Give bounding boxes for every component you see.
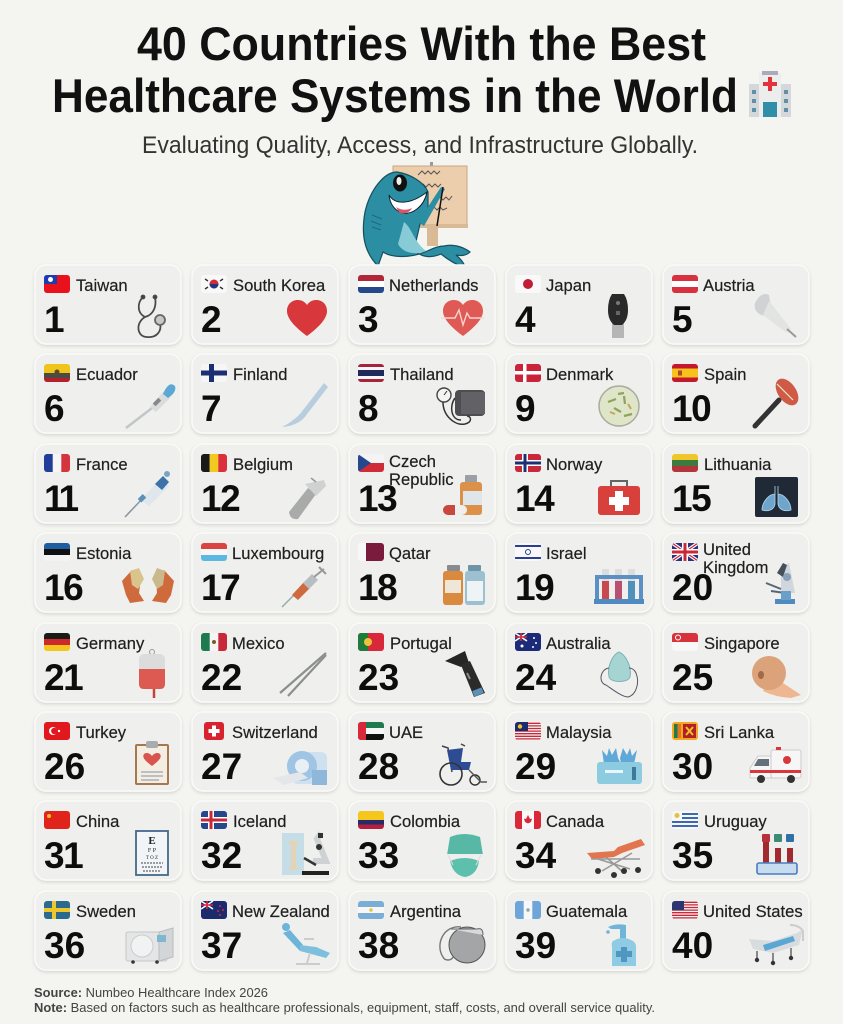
card: Finland [192,354,338,433]
name: Malaysia [546,723,612,742]
icon: ambulance [750,747,801,783]
card: Portugal [349,623,495,702]
flag: Singapore [672,633,698,651]
name: Portugal [390,634,452,653]
flag: Canada [515,811,541,829]
flag: Uruguay [672,811,698,829]
card: Denmark [506,354,652,433]
icon: bandage roll [752,656,801,698]
rank: 15 [672,478,711,519]
name: Sweden [76,902,136,921]
rank: 1 [44,299,65,340]
rank: 9 [515,388,536,429]
card: Czech Republic [349,444,495,523]
icon: blood sample tubes [757,834,797,874]
name: Luxembourg [232,544,324,563]
icon: stretcher [587,839,645,878]
icon: thermometer [126,384,175,428]
flag: Japan [515,275,541,293]
icon: test tube rack [594,569,644,604]
name: Netherlands [389,276,478,295]
name: Switzerland [232,723,318,742]
icon: bone x-ray and microscope [282,833,329,875]
source and note [34,985,655,1015]
flag: Turkey [44,722,70,740]
card: Czech Republic: Republic [389,470,454,489]
icon: MRI scanner [273,751,327,785]
name: Mexico [232,634,285,653]
rank: 38 [358,925,399,966]
rank: 25 [672,657,713,698]
name: Australia [546,634,611,653]
icon: scalpel [282,383,328,427]
icon: hand sanitizer [606,924,636,966]
card: Uruguay [663,801,809,880]
name: France [76,455,128,474]
rank: 5 [672,299,693,340]
card: Switzerland [192,712,338,791]
name: Singapore [704,634,780,653]
icon: eye chart: F P [148,848,157,854]
flag: United States [672,901,698,919]
card: Netherlands [349,265,495,344]
rank: 11 [44,478,79,519]
icon: red heart [287,300,327,336]
rank: 33 [358,835,399,876]
flag: Lithuania [672,454,698,472]
flag: Ecuador [44,364,70,382]
card: UAE [349,712,495,791]
name: Qatar [389,544,431,563]
name: China [76,812,120,831]
name: Guatemala [546,902,628,921]
name: Argentina [390,902,462,921]
name: Canada [546,812,605,831]
flag: Guatemala [515,901,541,919]
icon: stethoscope [138,296,165,337]
card: Germany [35,623,181,702]
card: Guatemala [506,891,652,970]
rank: 39 [515,925,556,966]
rank: 10 [672,388,711,429]
card: Japan [506,265,652,344]
name: Israel [546,544,587,563]
flag: Luxembourg [201,543,227,561]
flag: Mexico [201,633,227,651]
icon: blood pressure cuff [437,388,485,424]
flag: Taiwan [44,275,70,293]
rank: 23 [358,657,399,698]
card: China [35,801,181,880]
icon: heart with pulse [441,300,484,336]
name: South Korea [233,276,326,295]
card: Sweden [35,891,181,970]
flag: Spain [672,364,698,382]
name: Belgium [233,455,293,474]
flag: Argentina [358,901,384,919]
icon: box of gloves [597,748,642,784]
card: Argentina [349,891,495,970]
rank: 29 [515,746,556,787]
rank: 30 [672,746,713,787]
icon: reflex hammer [755,375,803,426]
icon: medicine vials [443,565,485,605]
card: Malaysia [506,712,652,791]
rank: 40 [672,925,713,966]
rank: 19 [515,567,554,608]
icon: microscope [766,563,795,604]
rank: 36 [44,925,85,966]
name: Thailand [390,365,454,384]
title: 40 Countries With the Best [137,17,706,70]
icon: pipette [125,471,170,517]
icon: dental handpiece [289,478,326,519]
flag: Germany [44,633,70,651]
card: Israel [506,533,652,612]
name: Ecuador [76,365,138,384]
rank: 14 [515,478,555,519]
rank: 27 [201,746,242,787]
icon: pair of gloves [122,568,174,603]
icon: ultrasound probe [755,294,796,337]
title: Healthcare Systems in the World [52,69,738,122]
name: Japan [546,276,591,295]
rank: 20 [672,567,713,608]
card: Qatar [349,533,495,612]
card: New Zealand [192,891,338,970]
rank: 13 [358,478,397,519]
flag: Sweden [44,901,70,919]
card: Canada [506,801,652,880]
rank: 35 [672,835,713,876]
card: Spain [663,354,809,433]
card: Norway [506,444,652,523]
rank: 16 [44,567,83,608]
rank: 28 [358,746,399,787]
flag: Thailand [358,364,384,382]
flag: Colombia [358,811,384,829]
name: Turkey [76,723,127,742]
name: Austria [703,276,755,295]
rank: 3 [358,299,379,340]
rank: 6 [44,388,65,429]
name: Sri Lanka [704,723,775,742]
icon: ophthalmoscope [608,294,628,338]
flag: Sri Lanka [672,722,698,740]
flag: Finland [201,364,227,382]
name: New Zealand [232,902,330,921]
name: Taiwan [76,276,128,295]
rank: 24 [515,657,557,698]
flag: Israel [515,543,541,561]
icon: eye chart: E [148,835,156,847]
title [52,17,738,122]
flag: Portugal [358,633,384,651]
card: Sri Lanka [663,712,809,791]
name: Denmark [546,365,614,384]
icon: medical clipboard [136,741,168,784]
name: United States [703,902,803,921]
subtitle: Evaluating Quality, Access, and Infrastructure Globally. [142,132,698,159]
name: Czech [389,452,436,471]
rank: 32 [201,835,242,876]
source and note: Source: Numbeo Healthcare Index 2026 [34,985,268,1000]
card: United Kingdom [663,533,809,612]
icon: surgical cap and mask [446,834,483,877]
rank: 7 [201,388,222,429]
rank: 18 [358,567,397,608]
icon: eye chart [136,831,168,875]
flag: Malaysia [515,722,541,740]
icon: syringe [282,567,326,607]
flag: Australia [515,633,541,651]
name: Estonia [76,544,132,563]
card: Ecuador [35,354,181,433]
rank: 17 [201,567,239,608]
flag: Denmark [515,364,541,382]
flag: United Kingdom [672,543,698,561]
icon: dental chair [282,923,330,964]
card: South Korea [192,265,338,344]
flag: France [44,454,70,472]
name: Iceland [233,812,287,831]
card: United Kingdom: Kingdom [703,558,768,577]
card: Iceland [192,801,338,880]
icon: hospital [749,71,791,117]
rank: 21 [44,657,83,698]
rank: 37 [201,925,242,966]
name: Uruguay [704,812,767,831]
flag: Estonia [44,543,70,555]
name: Colombia [390,812,461,831]
flag: Belgium [201,454,227,472]
rank: 26 [44,746,85,787]
icon: pacemaker [440,927,485,963]
card: Lithuania [663,444,809,523]
flag: South Korea [201,275,227,293]
flag: Czech Republic [358,454,384,472]
flag: Netherlands [358,275,384,293]
card: Colombia [349,801,495,880]
icon: blood bag [139,650,165,698]
card: Australia [506,623,652,702]
icon: otoscope [445,651,485,697]
icon: eye chart: T O Z [146,856,158,861]
flag: Iceland [201,811,227,829]
flag: China [44,811,70,829]
icon: autoclave [126,928,173,964]
card: Luxembourg [192,533,338,612]
name: Germany [76,634,145,653]
flag: Austria [672,275,698,293]
rank: 8 [358,388,379,429]
rank: 31 [44,835,83,876]
flag: UAE [358,722,384,740]
flag: Qatar [358,543,384,561]
card: Mexico [192,623,338,702]
name: Spain [704,365,746,384]
card: France [35,444,181,523]
card: United States [663,891,809,970]
flag: Switzerland [204,722,224,740]
rank: 4 [515,299,536,340]
name: United [703,540,751,559]
mascot: shark with chart board [363,162,470,268]
icon: hospital bed [749,925,803,965]
icon: first aid kit [598,481,640,515]
name: Lithuania [704,455,772,474]
source and note: Note: Based on factors such as healthcare professionals, equipment, staff, costs, and overall service quality. [34,1000,655,1015]
icon: tweezers [280,653,326,696]
flag: New Zealand [201,901,227,919]
card: Belgium [192,444,338,523]
icon: oxygen mask [601,652,638,697]
card: Estonia [35,533,181,612]
card: Singapore [663,623,809,702]
icon: medicine bottle and pill [443,475,482,515]
name: UAE [389,723,423,742]
card: Thailand [349,354,495,433]
flag: Norway [515,454,541,472]
icon: petri dish [599,386,639,426]
card: Taiwan [35,265,181,344]
name: Norway [546,455,603,474]
rank: 2 [201,299,222,340]
rank: 34 [515,835,557,876]
card: Turkey [35,712,181,791]
rank: 12 [201,478,240,519]
icon: wheelchair [440,744,487,785]
icon: chest x-ray [755,477,798,517]
card: Austria [663,265,809,344]
rank: 22 [201,657,242,698]
name: Finland [233,365,287,384]
